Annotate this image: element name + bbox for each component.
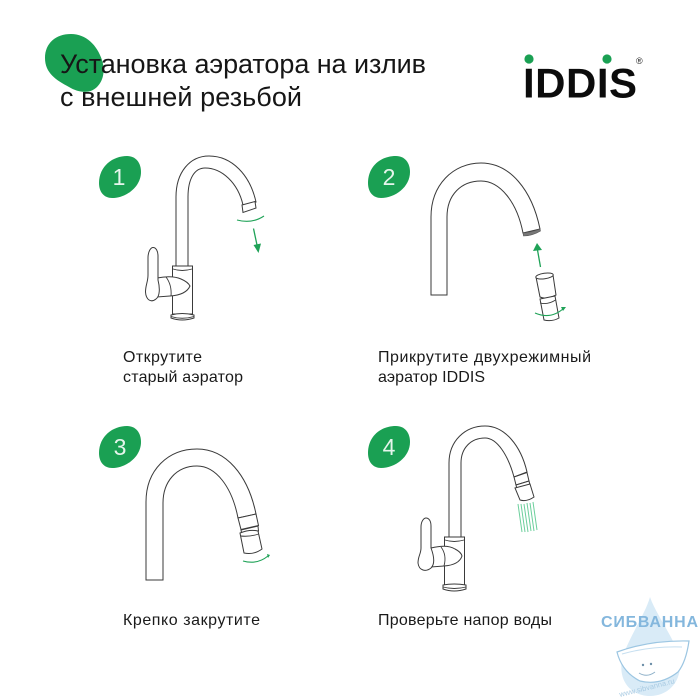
rotation arc <box>237 216 264 221</box>
step 2 text: аэратор IDDIS <box>378 369 485 386</box>
faucet with new aerator <box>418 426 534 591</box>
watermark: Сибванна: www.sibvanna.ru <box>617 676 676 699</box>
watermark: Сибванна <box>601 597 698 699</box>
step 3 text: Крепко закрутите <box>123 612 260 629</box>
watermark: Сибванна: СИБВАННА <box>601 614 698 631</box>
collar <box>238 514 258 530</box>
step 4 badge <box>368 426 410 468</box>
down arrow <box>254 228 261 253</box>
water jets <box>518 502 537 532</box>
spout <box>431 163 540 295</box>
step 2 text <box>378 349 591 386</box>
step 2 text: Прикрутите двухрежимный <box>378 349 591 366</box>
rotation arrow <box>243 554 270 562</box>
panel: step 3 <box>99 426 270 629</box>
aerator <box>535 272 559 321</box>
aerator installed <box>240 526 262 554</box>
title accent blob <box>45 34 104 92</box>
faucet with old aerator <box>146 156 256 320</box>
step 3 badge: 3 <box>114 434 126 460</box>
logo: IDDIS: IDDIS <box>523 60 637 106</box>
step 4 badge: 4 <box>383 434 396 460</box>
panel: step 2 <box>368 156 591 386</box>
spout <box>146 449 256 580</box>
rotation arrow <box>535 307 566 316</box>
step 1 text: старый аэратор <box>123 369 243 386</box>
step 1 badge: 1 <box>113 164 125 190</box>
logo: IDDIS: ® <box>636 56 643 66</box>
spout threaded tip <box>523 229 540 236</box>
step 1 text: Открутите <box>123 349 202 366</box>
panel: step 4 <box>368 426 552 629</box>
panel: step 1 <box>99 156 264 386</box>
step 4 text: Проверьте напор воды <box>378 612 552 629</box>
up arrow <box>533 243 542 267</box>
step 3 badge <box>99 426 141 468</box>
step 2 badge: 2 <box>383 164 395 190</box>
step 1 badge <box>99 156 141 198</box>
step 1 text <box>123 349 243 386</box>
title: с внешней резьбой <box>60 82 302 112</box>
title: Установка аэратора на излив <box>60 49 426 79</box>
title <box>60 49 426 112</box>
step 2 badge <box>368 156 410 198</box>
